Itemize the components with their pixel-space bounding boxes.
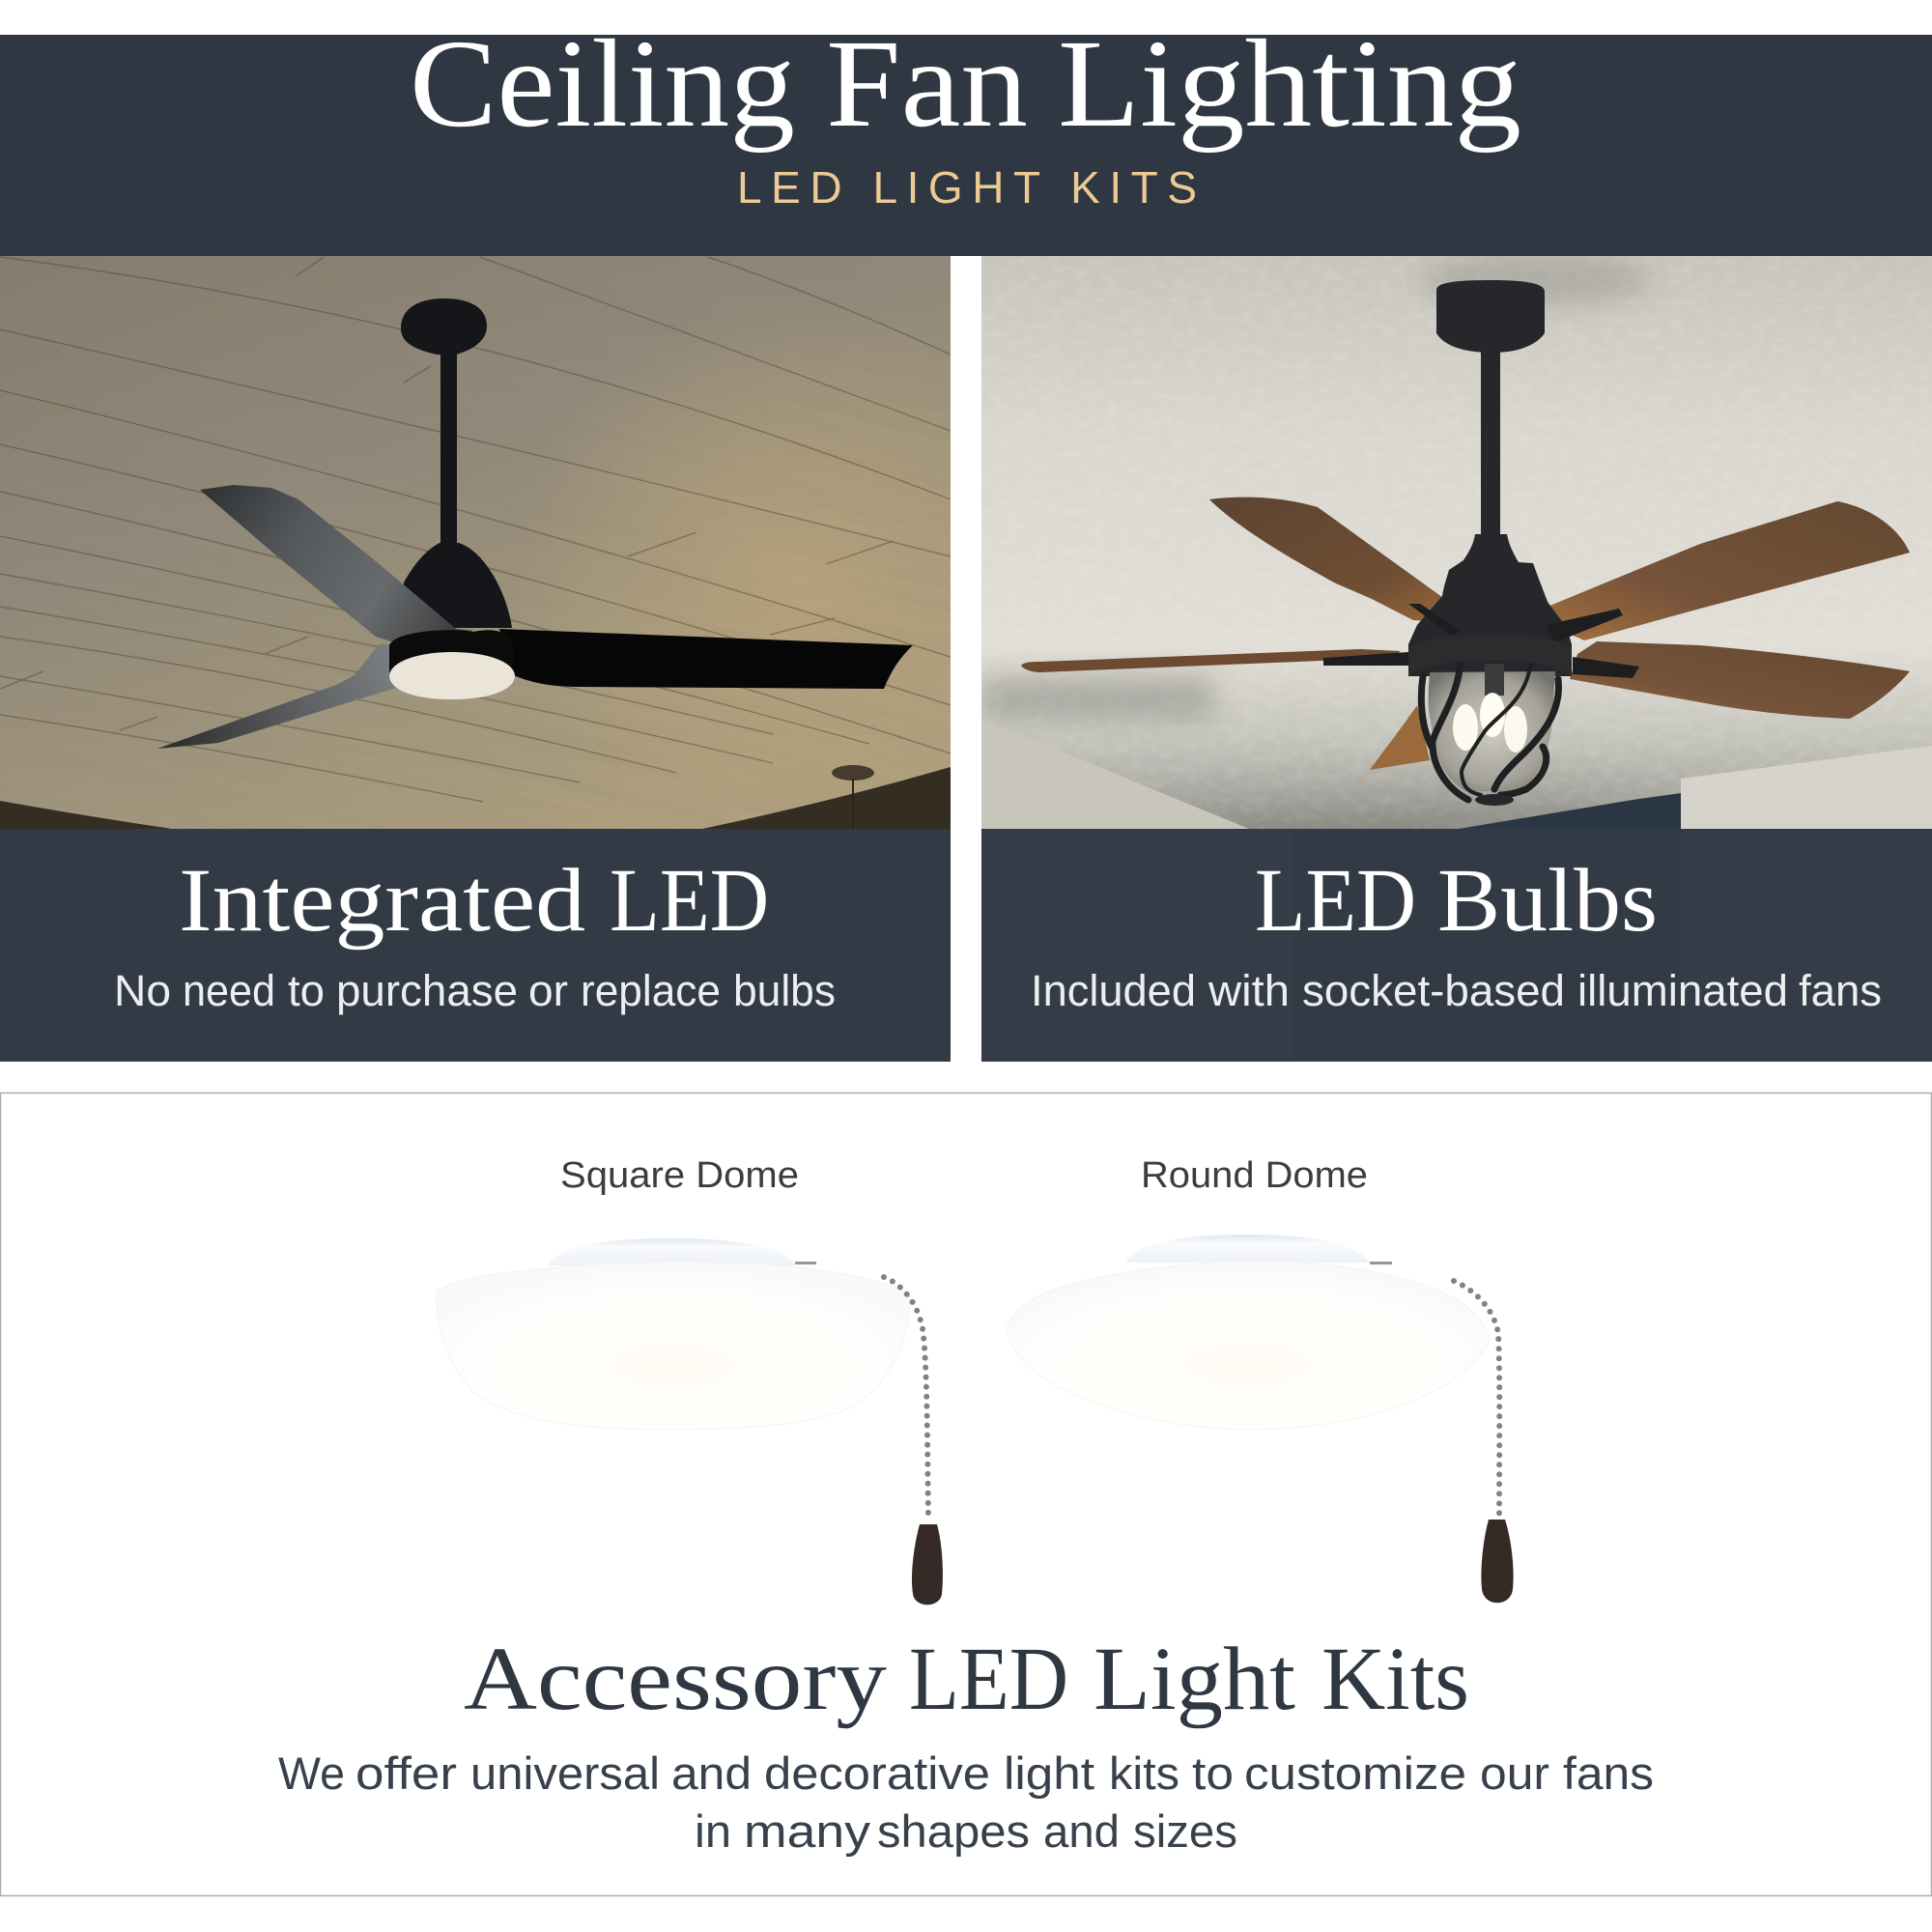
fan: canopy and rod (401, 298, 512, 628)
text: accessory kits description: decorative (764, 1747, 990, 1799)
text: accessory kits description: in (695, 1805, 731, 1857)
text: integrated LED note: to (288, 966, 325, 1015)
text: accessory kits description: and (671, 1747, 752, 1799)
text: accessory kits description: fans (1563, 1747, 1654, 1799)
title: Ceiling (410, 14, 795, 154)
heading: accessory kits: Light (1094, 1630, 1295, 1729)
label: square dome: Square Dome (560, 1155, 799, 1196)
text: integrated LED note: bulbs (733, 966, 836, 1015)
text: accessory kits description: kits (1109, 1747, 1179, 1799)
heading: LED bulbs: LED (1255, 851, 1416, 951)
text: LED bulbs note: illuminated (1577, 966, 1788, 1015)
text: accessory kits description: many (744, 1805, 871, 1857)
heading: integrated LED: Integrated (179, 851, 585, 951)
title: Fan (826, 14, 1028, 154)
text: integrated LED note: No (114, 966, 171, 1015)
fan: blades (1021, 497, 1910, 770)
text: accessory kits description: light (1004, 1747, 1094, 1799)
panel: integrated LED caption (0, 829, 951, 1062)
fan: right blade (499, 629, 913, 689)
fan: motor housing (1408, 534, 1572, 676)
text: accessory kits description: customize (1244, 1747, 1466, 1799)
wall left (981, 719, 1249, 829)
text: accessory kits description: offer (355, 1747, 457, 1799)
label: round dome: Round Dome (1141, 1155, 1368, 1196)
panel: accessory light kits (0, 1094, 1932, 1895)
text: accessory kits description: universal (470, 1747, 660, 1799)
fan: lower blade (157, 644, 396, 749)
text: integrated LED note: or (528, 966, 568, 1015)
wall right (1681, 746, 1932, 829)
text: integrated LED note: replace (581, 966, 721, 1015)
panel: LED bulbs photo (981, 253, 1932, 889)
text: accessory kits description: our (1480, 1747, 1549, 1799)
text: LED bulbs note: socket-based (1302, 966, 1565, 1015)
title: Lighting (1058, 14, 1521, 154)
subtitle: LED LIGHT KITS (737, 162, 1197, 213)
fan: upper blade (200, 485, 474, 642)
moulding (1459, 793, 1681, 829)
text: accessory kits description: sizes (1133, 1805, 1237, 1857)
heading: accessory kits: Accessory (464, 1630, 888, 1729)
text: integrated LED note: need (183, 966, 275, 1015)
fan: integrated light (389, 652, 515, 699)
fan: lantern with bulbs (1418, 641, 1562, 806)
text: accessory kits description: to (1192, 1747, 1234, 1799)
text: LED bulbs note: Included (1031, 966, 1196, 1015)
text: integrated LED note: purchase (336, 966, 518, 1015)
text: accessory kits description: We (278, 1747, 345, 1799)
heading: accessory kits: Kits (1321, 1630, 1469, 1729)
text: accessory kits description: shapes (877, 1805, 1030, 1857)
header banner (0, 14, 1932, 256)
fan: canopy and rod (1436, 280, 1545, 536)
panel: integrated LED photo (0, 256, 951, 829)
fan: pendant in background (832, 765, 874, 829)
text: accessory kits description (278, 1747, 1654, 1857)
fan: blade brackets (1323, 604, 1639, 678)
text: LED bulbs note: with (1208, 966, 1290, 1015)
fan: hub (389, 630, 514, 676)
heading: accessory kits: LED (909, 1630, 1068, 1729)
text: accessory kits description: and (1043, 1805, 1120, 1857)
icon: round dome light kit (1008, 1235, 1514, 1603)
text: LED bulbs note: fans (1799, 966, 1882, 1015)
panel: LED bulbs caption (981, 829, 1932, 1062)
heading: integrated LED: LED (610, 851, 769, 951)
heading: LED bulbs: Bulbs (1437, 851, 1658, 951)
icon: square dome light kit (437, 1238, 943, 1605)
